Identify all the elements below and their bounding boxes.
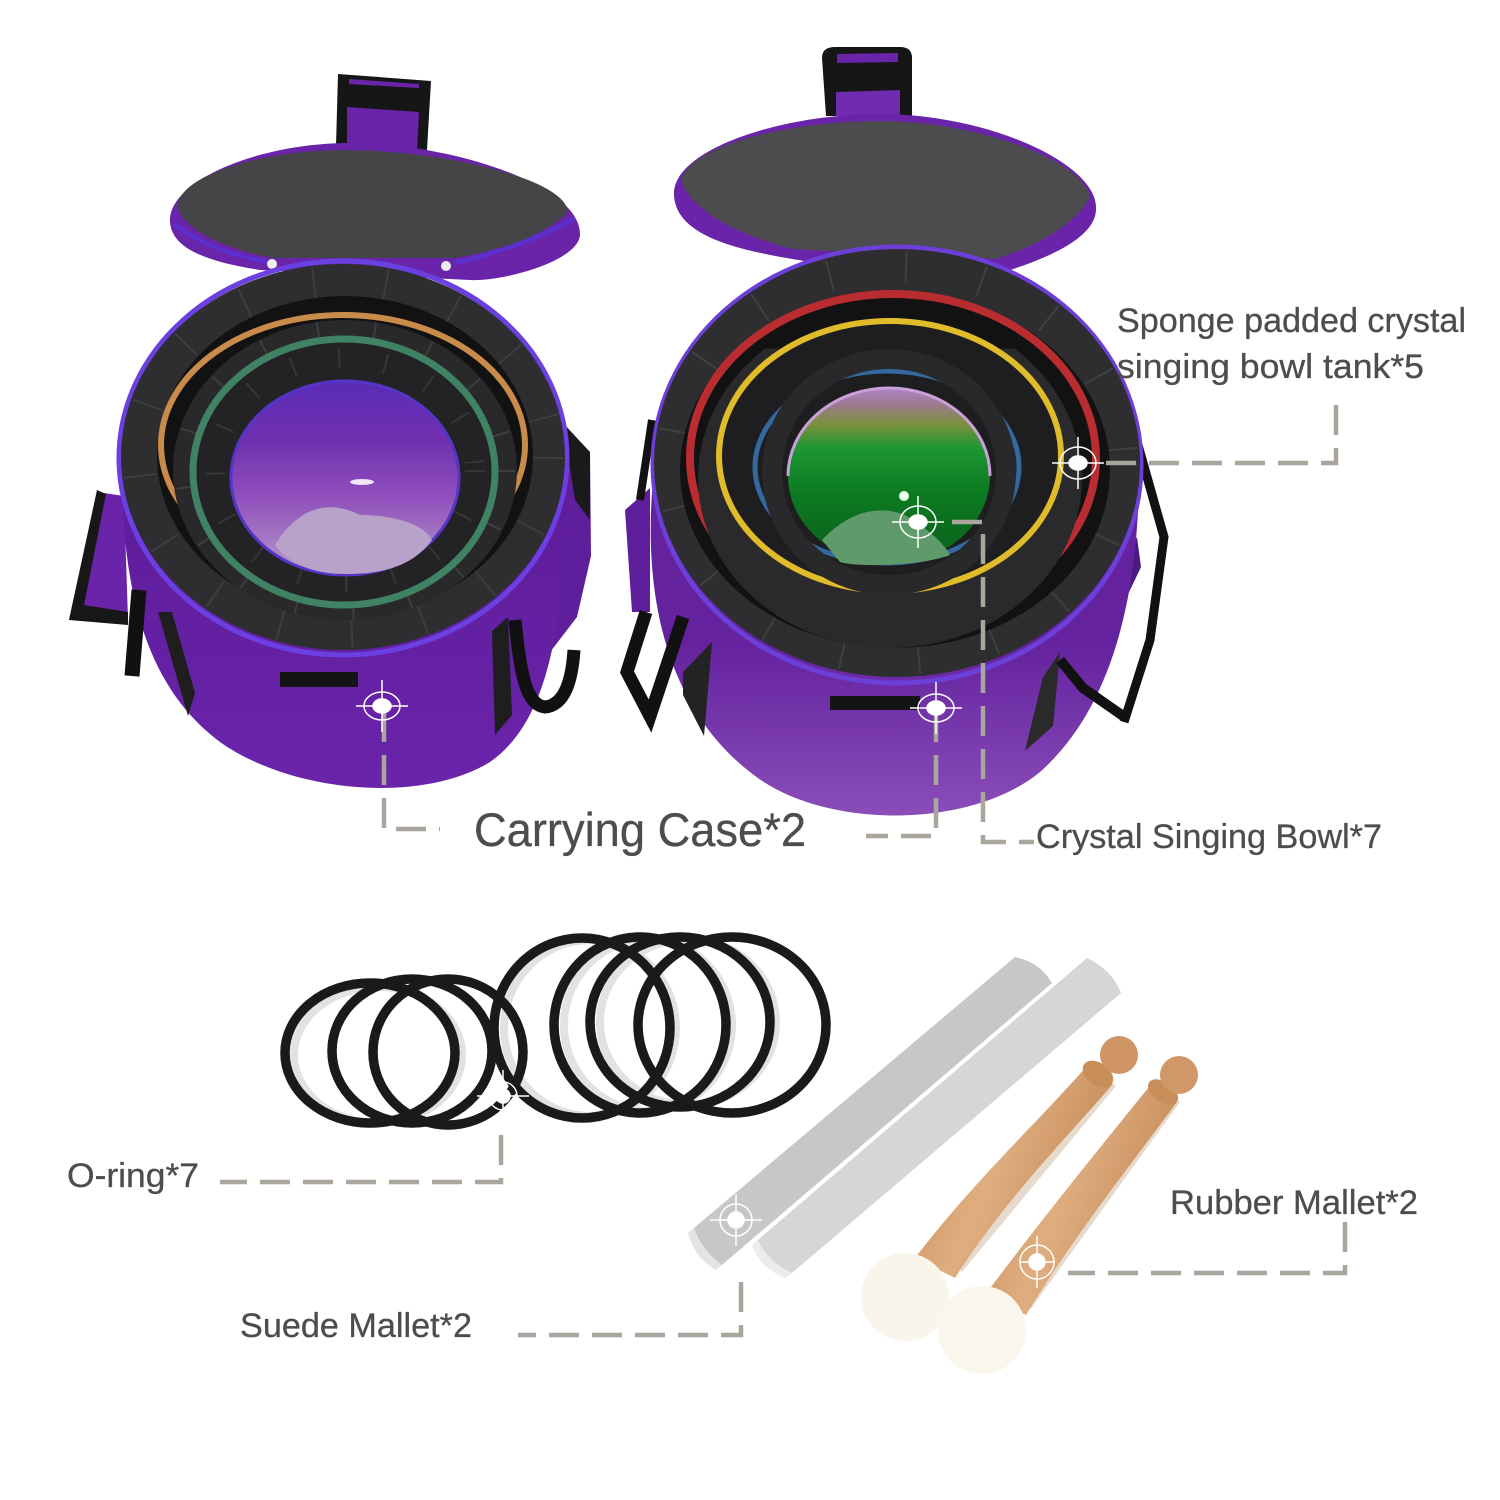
right case zipper [653,247,1141,683]
left carrying case [69,74,591,788]
left case zipper [119,261,567,655]
left padded tank rim [121,264,565,650]
right case open lid [674,114,1096,276]
suede mallets [688,957,1121,1278]
label: rubber mallet: Rubber Mallet*2 [1170,1184,1418,1222]
callout leader lines [220,405,1345,1335]
second mallet [938,1056,1198,1374]
o-ring shadows [294,939,776,1123]
left case body [122,470,566,788]
left case open lid [170,143,580,280]
label: suede mallet: Suede Mallet*2 [240,1307,472,1345]
left nested rings [161,315,525,620]
callout target markers [356,437,1104,1288]
left case strap handles [132,590,574,735]
left purple crystal bowl [231,381,459,575]
label: sponge padded tank: Sponge padded crystal [1117,302,1466,340]
first mallet [861,1036,1138,1341]
left case handle tab [336,74,431,150]
label: sponge padded tank line 2: singing bowl tank*5 [1117,348,1424,386]
left case side pockets [69,423,591,660]
mallet shadows [945,1072,1180,1310]
right case handle tab [822,47,912,116]
right carrying case [625,47,1164,816]
o-rings [285,937,826,1125]
right padded tank rim [654,249,1140,677]
right case strap handles [627,612,1126,751]
right case body [651,470,1139,816]
right case side pockets [625,420,1164,722]
right green crystal bowl [788,388,990,565]
label: o-ring: O-ring*7 [67,1157,199,1195]
rubber mallets [861,1036,1198,1374]
label: carrying case: Carrying Case*2 [474,803,806,856]
right nested rings [690,294,1096,648]
o-ring set [285,937,826,1125]
label: crystal singing bowl: Crystal Singing Bowl*7 [1036,818,1382,856]
